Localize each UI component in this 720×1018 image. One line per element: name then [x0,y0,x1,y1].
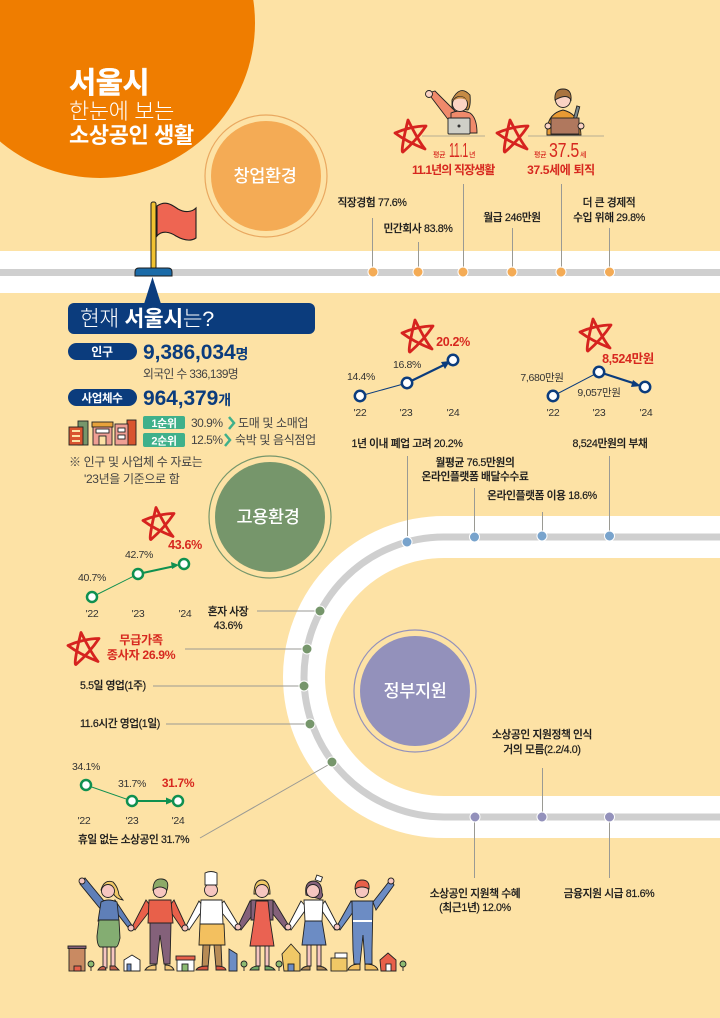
timeline: 고용환경 labels: 혼자 사장 [208,605,249,618]
timeline: 정부지원 labels: 금융지원 시급 81.6% [564,887,655,900]
line chart: 휴일 없는 소상공인: '22 [78,815,91,827]
orange title circle [0,0,255,178]
line chart: 부채: '23 [593,407,606,419]
rank 2 row [143,433,316,448]
timeline dots: purple [470,812,614,822]
line chart: 폐업 고려: '23 [400,407,413,419]
line chart: 혼자 사장: 42.7% [125,549,153,561]
icon: man with box [528,89,604,136]
footnote [69,455,203,486]
line chart: 혼자 사장: 40.7% [78,572,106,584]
person 5 [288,875,338,970]
rank 1 row: 30.9% [191,416,223,430]
line chart: 폐업 고려: '22 [354,407,367,419]
footnote: ※ 인구 및 사업체 수 자료는 [69,455,203,469]
rank 1 row: 1순위 [151,417,177,430]
line chart: 부채: '24 [640,407,653,419]
line chart: 폐업 고려: 14.4% [347,371,375,383]
line chart: 혼자 사장: '23 [132,608,145,620]
footnote: '23년을 기준으로 함 [84,472,180,486]
timeline: 고용환경 labels: 5.5일 영업(1주) [80,679,146,692]
line chart: 휴일 없는 소상공인: 34.1% [72,761,100,773]
business count stat: 사업체수 [82,392,123,405]
title: 소상공인 생활 [69,123,194,148]
timeline: 고용/폐업 labels [351,437,648,536]
callout: 평균 37.5세: 세 [580,150,586,159]
timeline: 고용환경 labels: 11.6시간 영업(1일) [80,717,160,730]
timeline: 정부지원 labels: 소상공인 지원책 수혜 [430,887,520,900]
timeline: 고용/폐업 labels: 온라인플랫폼 배달수수료 [422,470,529,483]
icon: red flag [135,202,196,276]
title [69,67,194,148]
circle: 고용환경 [209,456,331,578]
line chart: 휴일 없는 소상공인: 31.7% [118,778,146,790]
timeline: 정부지원 labels: 거의 모름(2.2/4.0) [503,744,581,756]
rank 1 row [143,416,308,430]
line chart: 휴일 없는 소상공인: '23 [126,815,139,827]
timeline: 고용환경 labels: 43.6% [214,620,243,632]
timeline dots: green [299,606,337,767]
population stat: 9,386,034명 [143,341,248,364]
star: 부채 [580,319,611,351]
business count stat [68,387,231,410]
title: 한눈에 보는 [69,99,174,124]
line chart: 부채: 7,680만원 [520,372,564,384]
business count stat: 964,379개 [143,387,231,410]
person 3 [186,872,239,970]
curved road [304,537,720,817]
line chart: 혼자 사장: 43.6% [168,538,202,552]
rank 2 row: 숙박 및 음식점업 [235,433,316,447]
timeline: 창업환경 labels: 월급 246만원 [483,211,541,224]
timeline: 창업환경 labels: 수입 위해 29.8% [573,211,646,224]
callout: 평균 11.1년: 평균 [433,150,446,159]
population stat [68,341,248,381]
timeline: 정부지원 labels: 소상공인 지원정책 인식 [492,728,592,741]
timeline: 고용/폐업 labels: 온라인플랫폼 이용 18.6% [487,490,598,502]
line chart: 부채: 9,057만원 [577,387,621,399]
line chart: 휴일 없는 소상공인 [72,761,195,827]
timeline dots: orange [368,267,614,277]
timeline dots: blue [402,531,614,547]
rank 2 row: 12.5% [191,433,223,447]
timeline: 창업환경 labels [337,184,646,268]
line chart: 부채 [520,352,654,419]
rank 1 row: 도매 및 소매업 [238,416,308,430]
line chart: 폐업 고려: 16.8% [393,359,421,371]
star: 직장생활 [395,120,426,152]
circle: 정부지원 [354,630,476,752]
top road [0,251,720,293]
timeline: 정부지원 labels [430,728,655,914]
circle: 창업환경 [205,115,327,237]
illustration: small town [68,944,406,971]
line chart: 혼자 사장 [78,538,202,620]
callout: 평균 11.1년: 년 [469,150,475,159]
icon: buildings [69,420,136,445]
line chart: 혼자 사장: '24 [179,608,192,620]
timeline: 창업환경 labels: 더 큰 경제적 [583,197,635,209]
timeline: 고용/폐업 labels: 1년 이내 폐업 고려 20.2% [351,437,463,450]
line chart: 휴일 없는 소상공인: '24 [172,815,185,827]
callout: 평균 37.5세: 37.5세에 퇴직 [527,163,595,177]
callout: 평균 11.1년: 11.1 [449,140,468,162]
line chart: 폐업 고려: '24 [447,407,460,419]
timeline: 창업환경 labels: 민간회사 83.8% [383,223,453,235]
population stat: 인구 [91,345,113,359]
title: 서울시 [69,67,149,100]
line chart: 부채: 8,524만원 [602,352,654,366]
star: 혼자 사장 [143,508,174,540]
timeline: 고용환경 labels: 종사자 26.9% [107,648,176,662]
person 2 [132,879,186,970]
header: 현재 서울시는? [68,277,315,334]
callout: 평균 37.5세 [527,140,595,177]
callout: 평균 37.5세: 37.5 [549,140,579,162]
line chart: 휴일 없는 소상공인: 31.7% [162,776,195,790]
callout: 평균 37.5세: 평균 [534,150,547,159]
circle: 창업환경: 창업환경 [234,166,296,186]
timeline: 정부지원 labels: (최근1년) 12.0% [439,901,512,914]
rank 2 row: 2순위 [151,434,177,448]
line chart: 부채: '22 [547,407,560,419]
timeline: 고용환경 labels: 휴일 없는 소상공인 31.7% [78,833,190,846]
star: 무급가족 [68,632,99,665]
timeline: 고용환경 labels [78,605,328,846]
timeline: 고용/폐업 labels: 월평균 76.5만원의 [436,456,514,469]
circle: 고용환경: 고용환경 [236,507,300,527]
callout: 평균 11.1년 [412,140,495,177]
hands [128,924,340,931]
timeline: 고용/폐업 labels: 8,524만원의 부채 [572,437,648,450]
header: 현재 서울시는?: 현재 서울시는? [80,307,214,331]
star: 퇴직 [497,120,528,152]
line chart: 혼자 사장: '22 [86,608,99,620]
star: 폐업 고려 [402,320,433,352]
line chart: 폐업 고려: 20.2% [436,335,470,349]
callout: 평균 11.1년: 11.1년의 직장생활 [412,163,495,177]
circle: 정부지원: 정부지원 [384,681,446,701]
person 4 [238,880,289,970]
timeline: 창업환경 labels: 직장경험 77.6% [337,196,407,209]
population stat: 외국인 수 336,139명 [143,367,238,381]
person 1 [79,878,133,970]
timeline: 고용환경 labels: 무급가족 [119,632,163,647]
line chart: 폐업 고려 [347,335,470,419]
person 6 [337,878,394,970]
icon: woman with laptop [422,90,485,136]
illustration: people holding hands [79,872,394,970]
